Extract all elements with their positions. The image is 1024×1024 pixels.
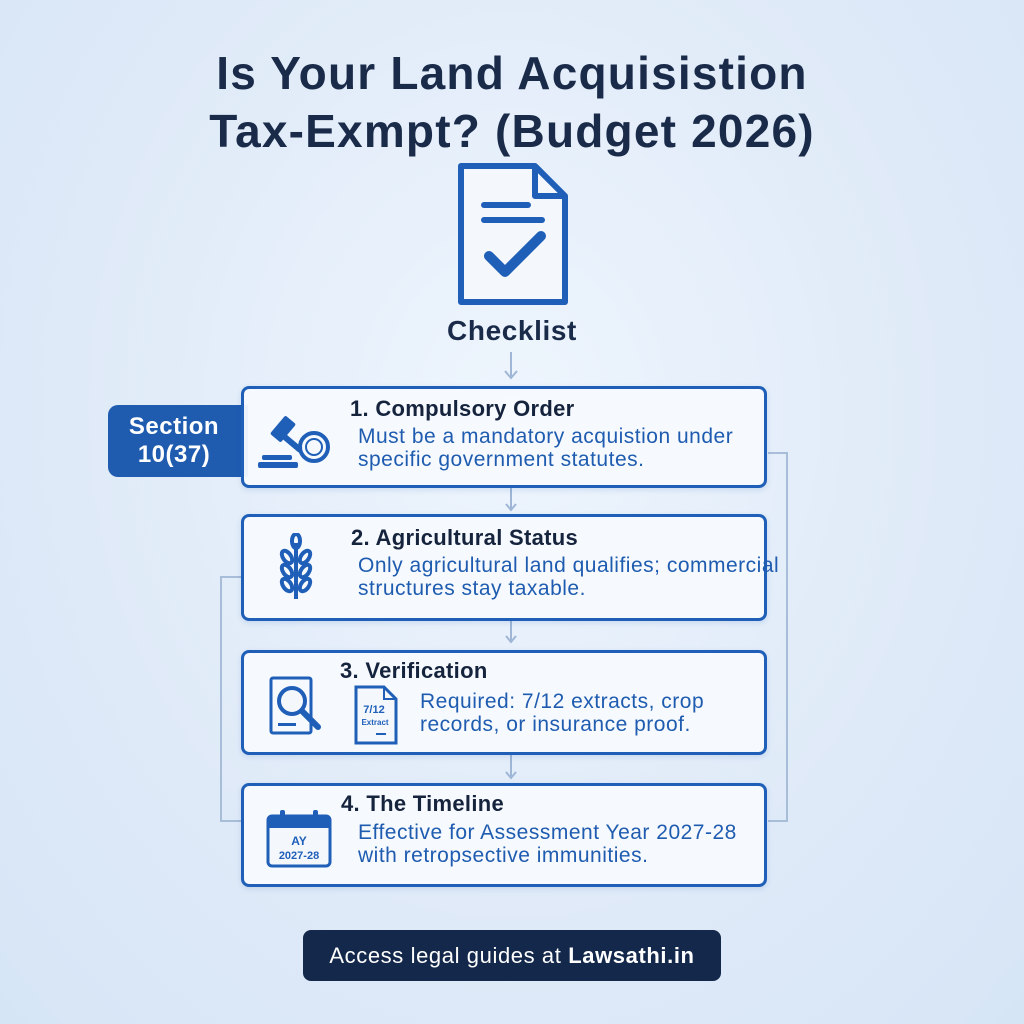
panel: card 1 compulsory order: [241, 386, 767, 488]
arrow: checklist to card 1: [504, 352, 518, 380]
text: Must be a mandatory acquistion under: [358, 425, 733, 448]
icon: magnifier document: [270, 676, 321, 734]
text: Effective for Assessment Year 2027-28: [358, 821, 737, 844]
text: specific government statutes.: [358, 448, 644, 471]
heading: 1. Compulsory Order: [350, 396, 575, 421]
icon: 7/12 extract: [354, 686, 398, 744]
heading: 3. Verification: [340, 658, 488, 683]
icon: gavel: [258, 416, 330, 468]
section tab: Section: [129, 413, 219, 440]
section tab: 10(37): [138, 441, 210, 468]
title: Is Your Land Acquisistion: [216, 47, 808, 99]
section tab: [108, 405, 248, 477]
text: with retropsective immunities.: [358, 844, 648, 867]
heading: Checklist: Checklist: [447, 315, 577, 346]
heading: 2. Agricultural Status: [351, 525, 578, 550]
text: Required: 7/12 extracts, crop: [420, 690, 704, 713]
panel: card 2 agricultural status: [241, 514, 767, 621]
icon: wheat: [280, 533, 312, 599]
footer button: Access legal guides at Lawsathi.in: [329, 943, 695, 968]
footer button: [303, 930, 721, 981]
heading: 4. The Timeline: [341, 791, 504, 816]
icon: checklist document: [458, 163, 568, 305]
arrows between cards: [505, 488, 517, 780]
text: [420, 690, 704, 736]
title: [209, 47, 815, 157]
icon: calendar: AY: [291, 834, 307, 848]
panel: card 4 timeline: [241, 783, 767, 887]
icon: calendar: 2027-28: [279, 850, 319, 862]
text: [358, 821, 737, 867]
icon: 7/12 extract: Extract: [361, 718, 389, 727]
panel: card 3 verification: [241, 650, 767, 755]
icon: calendar: [266, 810, 332, 868]
text: records, or insurance proof.: [420, 713, 691, 736]
text: [358, 425, 733, 471]
title: Tax-Exmpt? (Budget 2026): [209, 105, 815, 157]
text: structures stay taxable.: [358, 577, 586, 600]
icon: 7/12 extract: 7/12: [363, 704, 385, 716]
text: Only agricultural land qualifies; commercial: [358, 554, 779, 577]
text: [358, 554, 779, 600]
